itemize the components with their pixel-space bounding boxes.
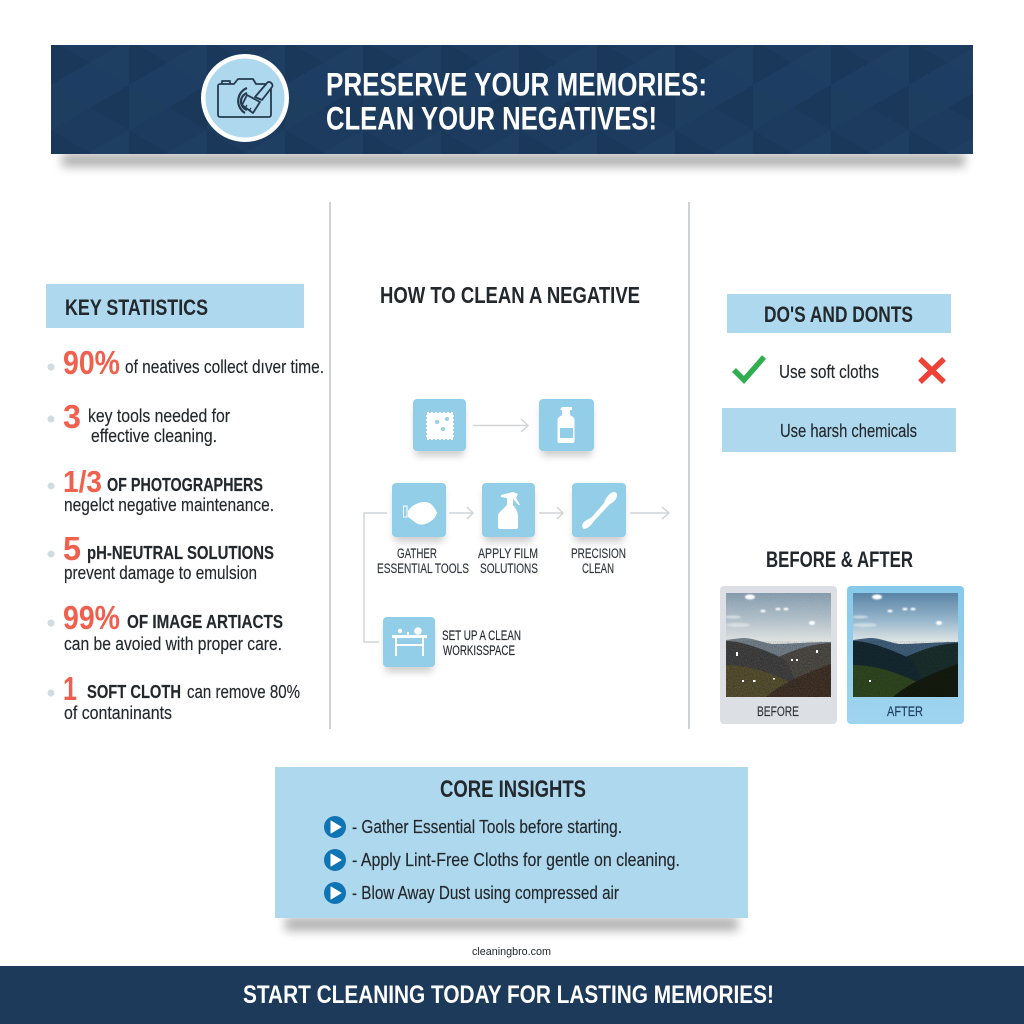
- arrow: [539, 507, 563, 519]
- stat: 90%: of neatives collect dıver time.: [125, 357, 324, 377]
- card: before: BEFORE: [757, 704, 799, 719]
- icon: bottle: [539, 399, 594, 456]
- insight: gather tools: - Gather Essential Tools before starting.: [352, 817, 622, 837]
- step: gather essential tools: GATHER: [397, 546, 437, 561]
- heading: do's and donts: [727, 294, 951, 333]
- step: apply film solutions: APPLY FILM: [478, 546, 538, 561]
- panel: before and after: [720, 547, 964, 724]
- card: after: AFTER: [887, 704, 923, 719]
- step: set up a clean workspace: SET UP A CLEAN: [442, 628, 521, 643]
- heading: key statistics: KEY STATISTICS: [65, 295, 208, 320]
- stat: 3: effective cleaning.: [91, 426, 217, 446]
- step: apply film solutions: [478, 483, 538, 576]
- callout: use harsh chemicals: Use harsh chemicals: [780, 421, 917, 441]
- stat: 3: key tools needed for: [88, 406, 230, 426]
- step: gather essential tools: ESSENTIAL TOOLS: [377, 561, 469, 576]
- arrow: [630, 507, 669, 519]
- stat: 99%: can be avoied with proper care.: [64, 634, 282, 654]
- step: set up a clean workspace: WORKISSPACE: [443, 643, 515, 658]
- step: apply film solutions: SOLUTIONS: [480, 561, 538, 576]
- footer banner: START CLEANING TODAY FOR LASTING MEMORIES!: [243, 981, 774, 1009]
- stat: 1/3: 1/3: [63, 464, 102, 499]
- heading: core insights: CORE INSIGHTS: [440, 776, 586, 803]
- icon: camera with brush: [201, 54, 289, 142]
- stat: 5: prevent damage to emulsion: [64, 563, 257, 583]
- title: CLEAN YOUR NEGATIVES!: [326, 100, 657, 136]
- connector bracket: [364, 513, 387, 642]
- footer banner: [0, 966, 1024, 1024]
- header banner: [51, 45, 973, 167]
- stat: 3: 3: [63, 398, 81, 435]
- stat: 1: [48, 670, 300, 723]
- stat: 5: [48, 530, 274, 583]
- icon: red cross: [920, 359, 944, 382]
- heading: do's and donts: DO'S AND DONTS: [764, 302, 913, 327]
- stat: 1: 1: [63, 670, 77, 707]
- stat: 1/3: negelct negative maintenance.: [64, 495, 274, 515]
- stat: 1: SOFT CLOTH: [87, 682, 181, 702]
- panel: key statistics: [46, 284, 324, 723]
- step: precision clean: PRECISION: [571, 546, 626, 561]
- card: after: [847, 586, 964, 724]
- card: before: [720, 586, 837, 724]
- panel: how to clean a negative: [364, 282, 669, 672]
- stat: 3: [48, 398, 230, 446]
- stat: 90%: 90%: [63, 344, 120, 381]
- arrow: [449, 507, 473, 519]
- stat: 1/3: [48, 464, 274, 515]
- panel: do's and don'ts: [722, 294, 956, 452]
- stat: 5: pH-NEUTRAL SOLUTIONS: [87, 543, 274, 563]
- stat: 99%: OF IMAGE ARTIACTS: [127, 612, 283, 632]
- arrow: [473, 419, 528, 432]
- insight: blow away dust: - Blow Away Dust using compressed air: [352, 883, 619, 903]
- stat: 99%: 99%: [63, 599, 120, 636]
- step: precision clean: [571, 483, 626, 576]
- title: PRESERVE YOUR MEMORIES:: [326, 66, 707, 102]
- icon: green check: [734, 357, 764, 380]
- panel: core insights: [275, 767, 748, 931]
- stat: 1/3: OF PHOTOGRAPHERS: [107, 475, 263, 495]
- callout: use harsh chemicals: [722, 408, 956, 452]
- stat: 1: of contaninants: [64, 703, 172, 723]
- heading: how to clean: HOW TO CLEAN A NEGATIVE: [380, 282, 640, 308]
- source credit: cleaningbro.com: [472, 946, 551, 958]
- insight: lint-free cloths: - Apply Lint-Free Cloths for gentle on cleaning.: [352, 850, 680, 870]
- step: set up a clean workspace: [383, 617, 521, 672]
- step: precision clean: CLEAN: [582, 561, 614, 576]
- stat: 99%: [48, 599, 283, 654]
- heading: before and after: BEFORE & AFTER: [766, 547, 913, 572]
- icon: cloth: [413, 399, 466, 456]
- stat: 5: 5: [63, 530, 81, 567]
- stat: 90%: [48, 344, 324, 381]
- step: gather essential tools: [377, 483, 469, 576]
- heading: key statistics: [46, 284, 304, 328]
- text: use soft cloths: Use soft cloths: [779, 362, 879, 382]
- stat: 1: can remove 80%: [187, 682, 300, 702]
- title: [326, 66, 707, 136]
